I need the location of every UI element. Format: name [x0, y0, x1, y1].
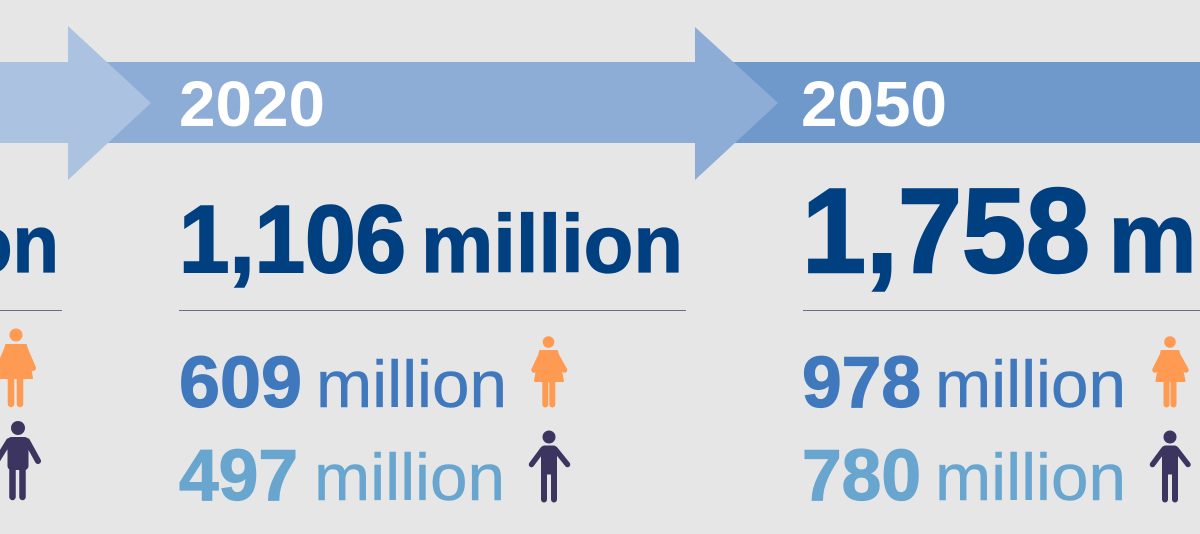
women 2050: million	[935, 347, 1126, 421]
men 2050: million	[935, 440, 1126, 514]
men 2020	[179, 436, 505, 516]
total 2020	[179, 186, 683, 293]
icon: woman 2050	[1155, 336, 1186, 404]
women 2020	[179, 343, 507, 423]
men 2020: 497	[179, 436, 298, 516]
men 2020: million	[314, 440, 505, 514]
women 2020: million	[316, 347, 507, 421]
total 2050: 1,758	[802, 164, 1090, 298]
total 2020: million	[421, 199, 683, 290]
icon: man 2020	[532, 430, 568, 500]
women 2050	[802, 343, 1126, 423]
arrow: previous period	[0, 26, 151, 180]
men 2050: 780	[802, 436, 921, 516]
icon: man, previous period	[0, 421, 38, 497]
women 2020: 609	[179, 343, 302, 423]
women 2050: 978	[802, 343, 921, 423]
icon: woman 2020	[534, 336, 564, 404]
men 2050	[802, 436, 1126, 516]
total 2050: m	[1108, 182, 1197, 294]
year: 2020: 2020	[179, 68, 325, 140]
total 2020: 1,106	[179, 186, 406, 293]
arrow band: 2050	[720, 62, 1200, 143]
icon: woman, previous period	[0, 328, 33, 404]
arrow: 2020	[100, 27, 778, 180]
year: 2050: 2050	[801, 68, 947, 140]
icon: man 2050	[1152, 430, 1188, 500]
